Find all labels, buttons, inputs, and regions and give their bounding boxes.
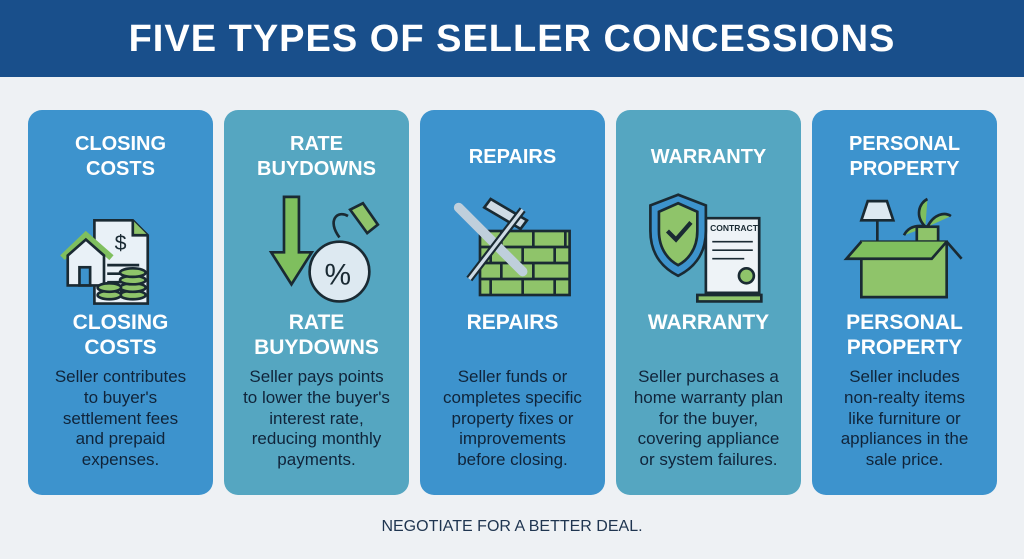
heading: rate buydowns: RATE xyxy=(290,133,343,155)
heading: personal property: PROPERTY xyxy=(849,158,960,180)
heading: warranty (lower): WARRANTY xyxy=(648,311,769,334)
description: completes specific xyxy=(443,388,582,407)
description: reducing monthly xyxy=(252,429,381,448)
description xyxy=(243,367,390,469)
heading: closing costs: CLOSING xyxy=(75,133,166,155)
heading: rate buydowns (lower) xyxy=(254,311,379,359)
panel: repairs xyxy=(420,110,605,495)
heading: rate buydowns (lower): BUYDOWNS xyxy=(254,336,379,359)
title xyxy=(0,0,1024,77)
description: Seller purchases a xyxy=(638,367,779,386)
heading: personal property (lower): PROPERTY xyxy=(847,336,962,359)
description: Seller includes xyxy=(849,367,960,386)
heading: closing costs (lower) xyxy=(73,311,168,359)
heading: closing costs xyxy=(75,133,166,180)
panel: warranty xyxy=(616,110,801,495)
description: expenses. xyxy=(82,450,159,469)
description: non-realty items xyxy=(844,388,965,407)
description: Seller pays points xyxy=(249,367,384,386)
heading: closing costs (lower): CLOSING xyxy=(73,311,168,334)
description: for the buyer, xyxy=(659,409,758,428)
description: Seller funds or xyxy=(458,367,567,386)
heading: repairs: REPAIRS xyxy=(469,146,556,168)
description: covering appliance xyxy=(638,429,779,448)
heading: closing costs (lower): COSTS xyxy=(84,336,157,359)
description xyxy=(55,367,186,469)
description: appliances in the xyxy=(841,429,968,448)
description: improvements xyxy=(459,429,566,448)
heading: warranty: WARRANTY xyxy=(651,146,766,168)
description: to buyer's xyxy=(84,388,157,407)
description: home warranty plan xyxy=(634,388,783,407)
heading: personal property (lower) xyxy=(846,311,963,359)
panel: closing costs xyxy=(28,110,213,495)
heading: personal property (lower): PERSONAL xyxy=(846,311,963,334)
title: FIVE TYPES OF SELLER CONCESSIONS xyxy=(129,18,895,60)
description: before closing. xyxy=(457,450,568,469)
description: like furniture or xyxy=(848,409,961,428)
description: to lower the buyer's xyxy=(243,388,390,407)
description: property fixes or xyxy=(452,409,573,428)
heading: personal property xyxy=(849,133,960,180)
description: interest rate, xyxy=(269,409,364,428)
icon: tools and brick wall xyxy=(454,197,571,296)
footer tagline: NEGOTIATE FOR A BETTER DEAL. xyxy=(381,518,643,535)
icon: shield and contract xyxy=(649,193,763,303)
heading: rate buydowns: BUYDOWNS xyxy=(257,158,376,180)
description xyxy=(634,367,783,469)
description: Seller contributes xyxy=(55,367,186,386)
heading: repairs (lower): REPAIRS xyxy=(467,311,558,334)
heading: rate buydowns xyxy=(257,133,376,180)
heading: closing costs: COSTS xyxy=(86,158,155,180)
description: payments. xyxy=(277,450,356,469)
panel: personal property xyxy=(812,110,997,495)
description: sale price. xyxy=(866,450,943,469)
heading: personal property: PERSONAL xyxy=(849,133,960,155)
icon: shield and contract: CONTRACT xyxy=(710,223,759,233)
description: settlement fees xyxy=(63,409,178,428)
heading: rate buydowns (lower): RATE xyxy=(289,311,344,334)
icon: box with lamp and plant xyxy=(844,198,962,298)
description xyxy=(443,367,582,469)
icon: down arrow with percent tag xyxy=(268,196,380,303)
description: and prepaid xyxy=(76,429,165,448)
icon: house, document, coins xyxy=(60,219,150,305)
icon: down arrow with percent tag: % xyxy=(325,258,351,291)
description xyxy=(841,367,968,469)
description: or system failures. xyxy=(640,450,777,469)
panel: rate buydowns xyxy=(224,110,409,495)
icon: house, document, coins: $ xyxy=(115,231,127,255)
